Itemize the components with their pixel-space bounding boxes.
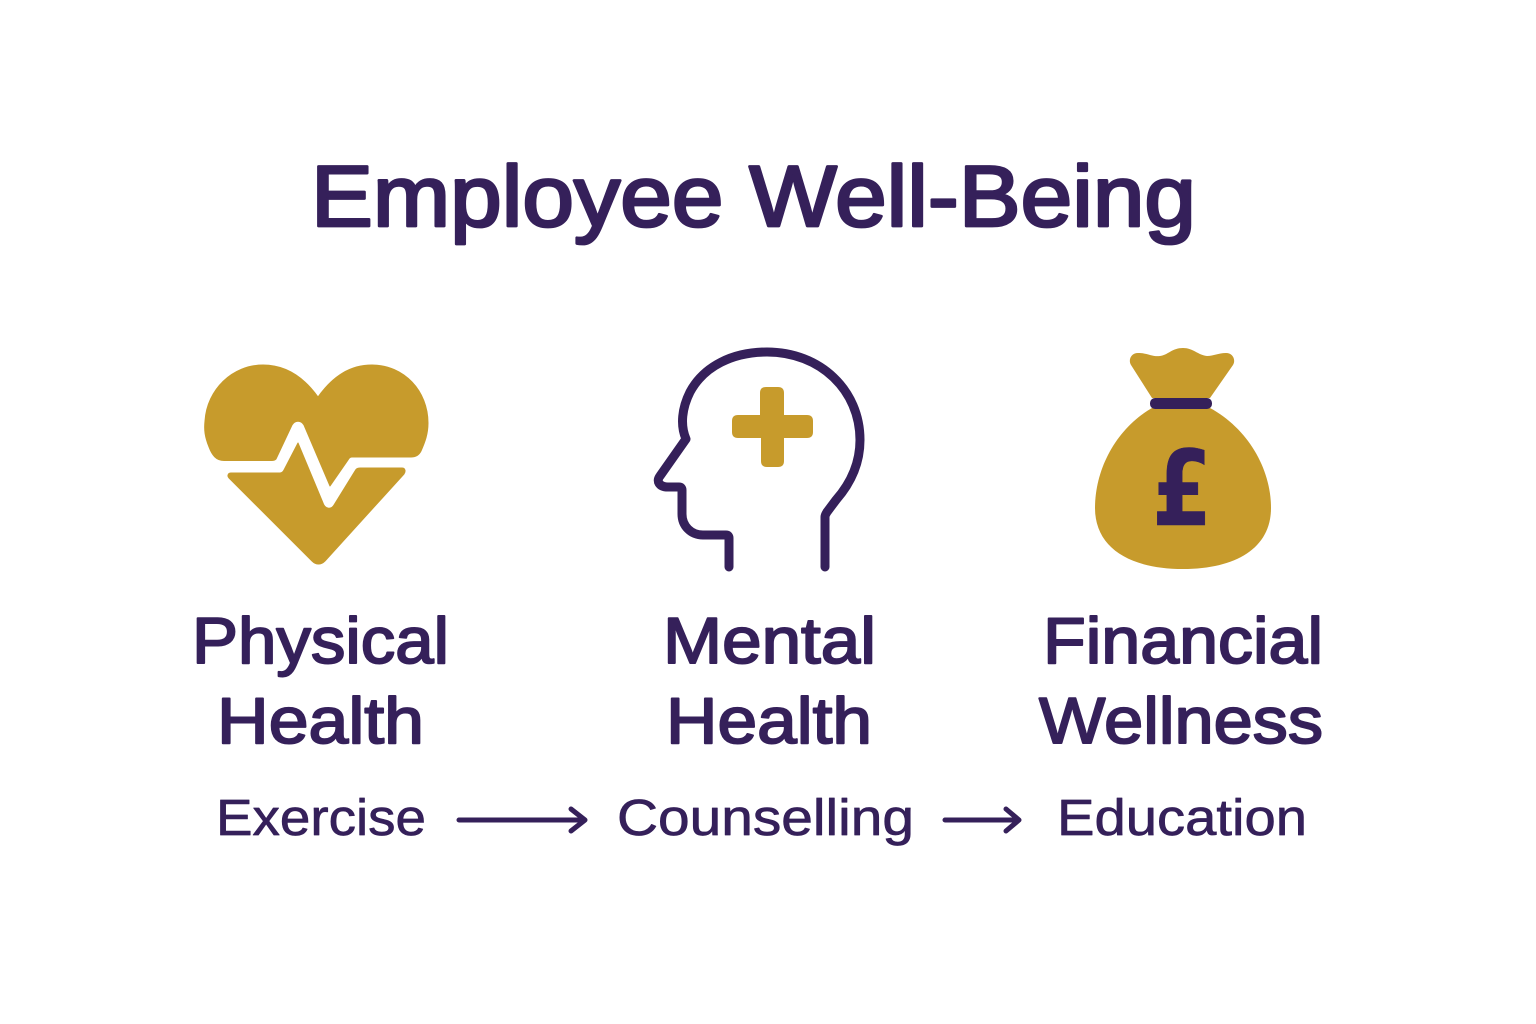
icon: heart with pulse line — [205, 365, 428, 564]
label: Education: Education — [1057, 789, 1307, 846]
heading: Physical Health: Health — [217, 684, 424, 757]
heading: Mental Health: Health — [666, 684, 872, 757]
heading: Physical Health — [192, 604, 449, 757]
heading: Financial Wellness: Financial — [1043, 604, 1323, 677]
icon: medical cross — [732, 387, 813, 467]
heading: Physical Health: Physical — [192, 604, 449, 677]
label: Counselling: Counselling — [617, 789, 914, 846]
heading: Mental Health — [663, 604, 876, 757]
label: Exercise: Exercise — [216, 789, 426, 846]
icon: head outline with medical cross — [658, 352, 860, 567]
heading: Financial Wellness: Wellness — [1039, 684, 1323, 757]
icon: bag tie — [1150, 398, 1212, 409]
arrow: Exercise to Counselling — [459, 809, 585, 831]
arrow: Counselling to Education — [945, 809, 1019, 831]
heading: Mental Health: Mental — [663, 604, 876, 677]
icon: pound sign: £ — [1152, 428, 1212, 550]
heading: Financial Wellness — [1039, 604, 1323, 757]
title: Employee Well-Being — [311, 149, 1196, 245]
icon: money bag with pound sign — [1095, 348, 1271, 569]
